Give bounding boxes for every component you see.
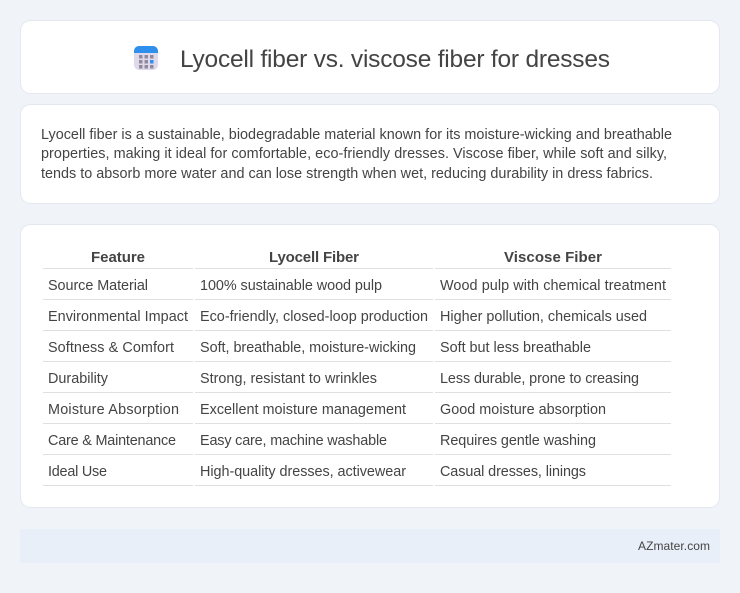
comparison table card bbox=[20, 224, 720, 508]
row: care and maintenance: Care & Maintenance bbox=[48, 433, 176, 449]
row: moisture absorption bbox=[48, 402, 606, 418]
title: Lyocell fiber vs. viscose fiber for dresses bbox=[180, 46, 610, 73]
row: softness and comfort: Soft, breathable, moisture-wicking bbox=[200, 340, 416, 356]
row: source material: Wood pulp with chemical treatment bbox=[440, 278, 666, 294]
row: care and maintenance bbox=[48, 433, 596, 449]
row: durability: Durability bbox=[48, 371, 109, 387]
table header row: Viscose Fiber bbox=[504, 249, 602, 266]
row: ideal use bbox=[48, 464, 586, 480]
row: care and maintenance: Requires gentle washing bbox=[440, 433, 596, 449]
row: source material bbox=[48, 278, 666, 294]
footer credit: AZmater.com bbox=[638, 539, 710, 553]
row: ideal use: Ideal Use bbox=[48, 464, 107, 480]
table header row bbox=[91, 249, 602, 266]
row: ideal use: High-quality dresses, activewear bbox=[200, 464, 406, 480]
row: environmental impact: Higher pollution, chemicals used bbox=[440, 309, 647, 325]
row: softness and comfort: Soft but less breathable bbox=[440, 340, 591, 356]
intro text: tends to absorb more water and can lose strength when wet, reducing durability in dress fabrics. bbox=[41, 166, 653, 182]
footer bar bbox=[20, 529, 720, 563]
intro text: Lyocell fiber is a sustainable, biodegradable material known for its moisture-wicking and breathable bbox=[41, 127, 672, 143]
intro text bbox=[41, 127, 672, 182]
intro text: properties, making it ideal for comfortable, eco-friendly dresses. Viscose fiber, while soft and silky, bbox=[41, 146, 667, 162]
row: durability bbox=[48, 371, 639, 387]
row: environmental impact bbox=[48, 309, 647, 325]
row: moisture absorption: Excellent moisture management bbox=[200, 402, 406, 418]
row: softness and comfort bbox=[48, 340, 591, 356]
row: source material: 100% sustainable wood pulp bbox=[200, 278, 382, 294]
header card bbox=[20, 20, 720, 94]
row: durability: Less durable, prone to creasing bbox=[440, 371, 639, 387]
row: ideal use: Casual dresses, linings bbox=[440, 464, 586, 480]
row: moisture absorption: Moisture Absorption bbox=[48, 402, 179, 418]
icon: calendar bbox=[134, 46, 158, 70]
table header row: Lyocell Fiber bbox=[269, 249, 359, 266]
row: environmental impact: Eco-friendly, closed-loop production bbox=[200, 309, 428, 325]
row: moisture absorption: Good moisture absorption bbox=[440, 402, 606, 418]
intro card bbox=[20, 104, 720, 204]
row: environmental impact: Environmental Impact bbox=[48, 309, 188, 325]
row: softness and comfort: Softness & Comfort bbox=[48, 340, 174, 356]
table header row: Feature bbox=[91, 249, 145, 266]
row: care and maintenance: Easy care, machine washable bbox=[200, 433, 387, 449]
row: durability: Strong, resistant to wrinkles bbox=[200, 371, 377, 387]
row: source material: Source Material bbox=[48, 278, 148, 294]
